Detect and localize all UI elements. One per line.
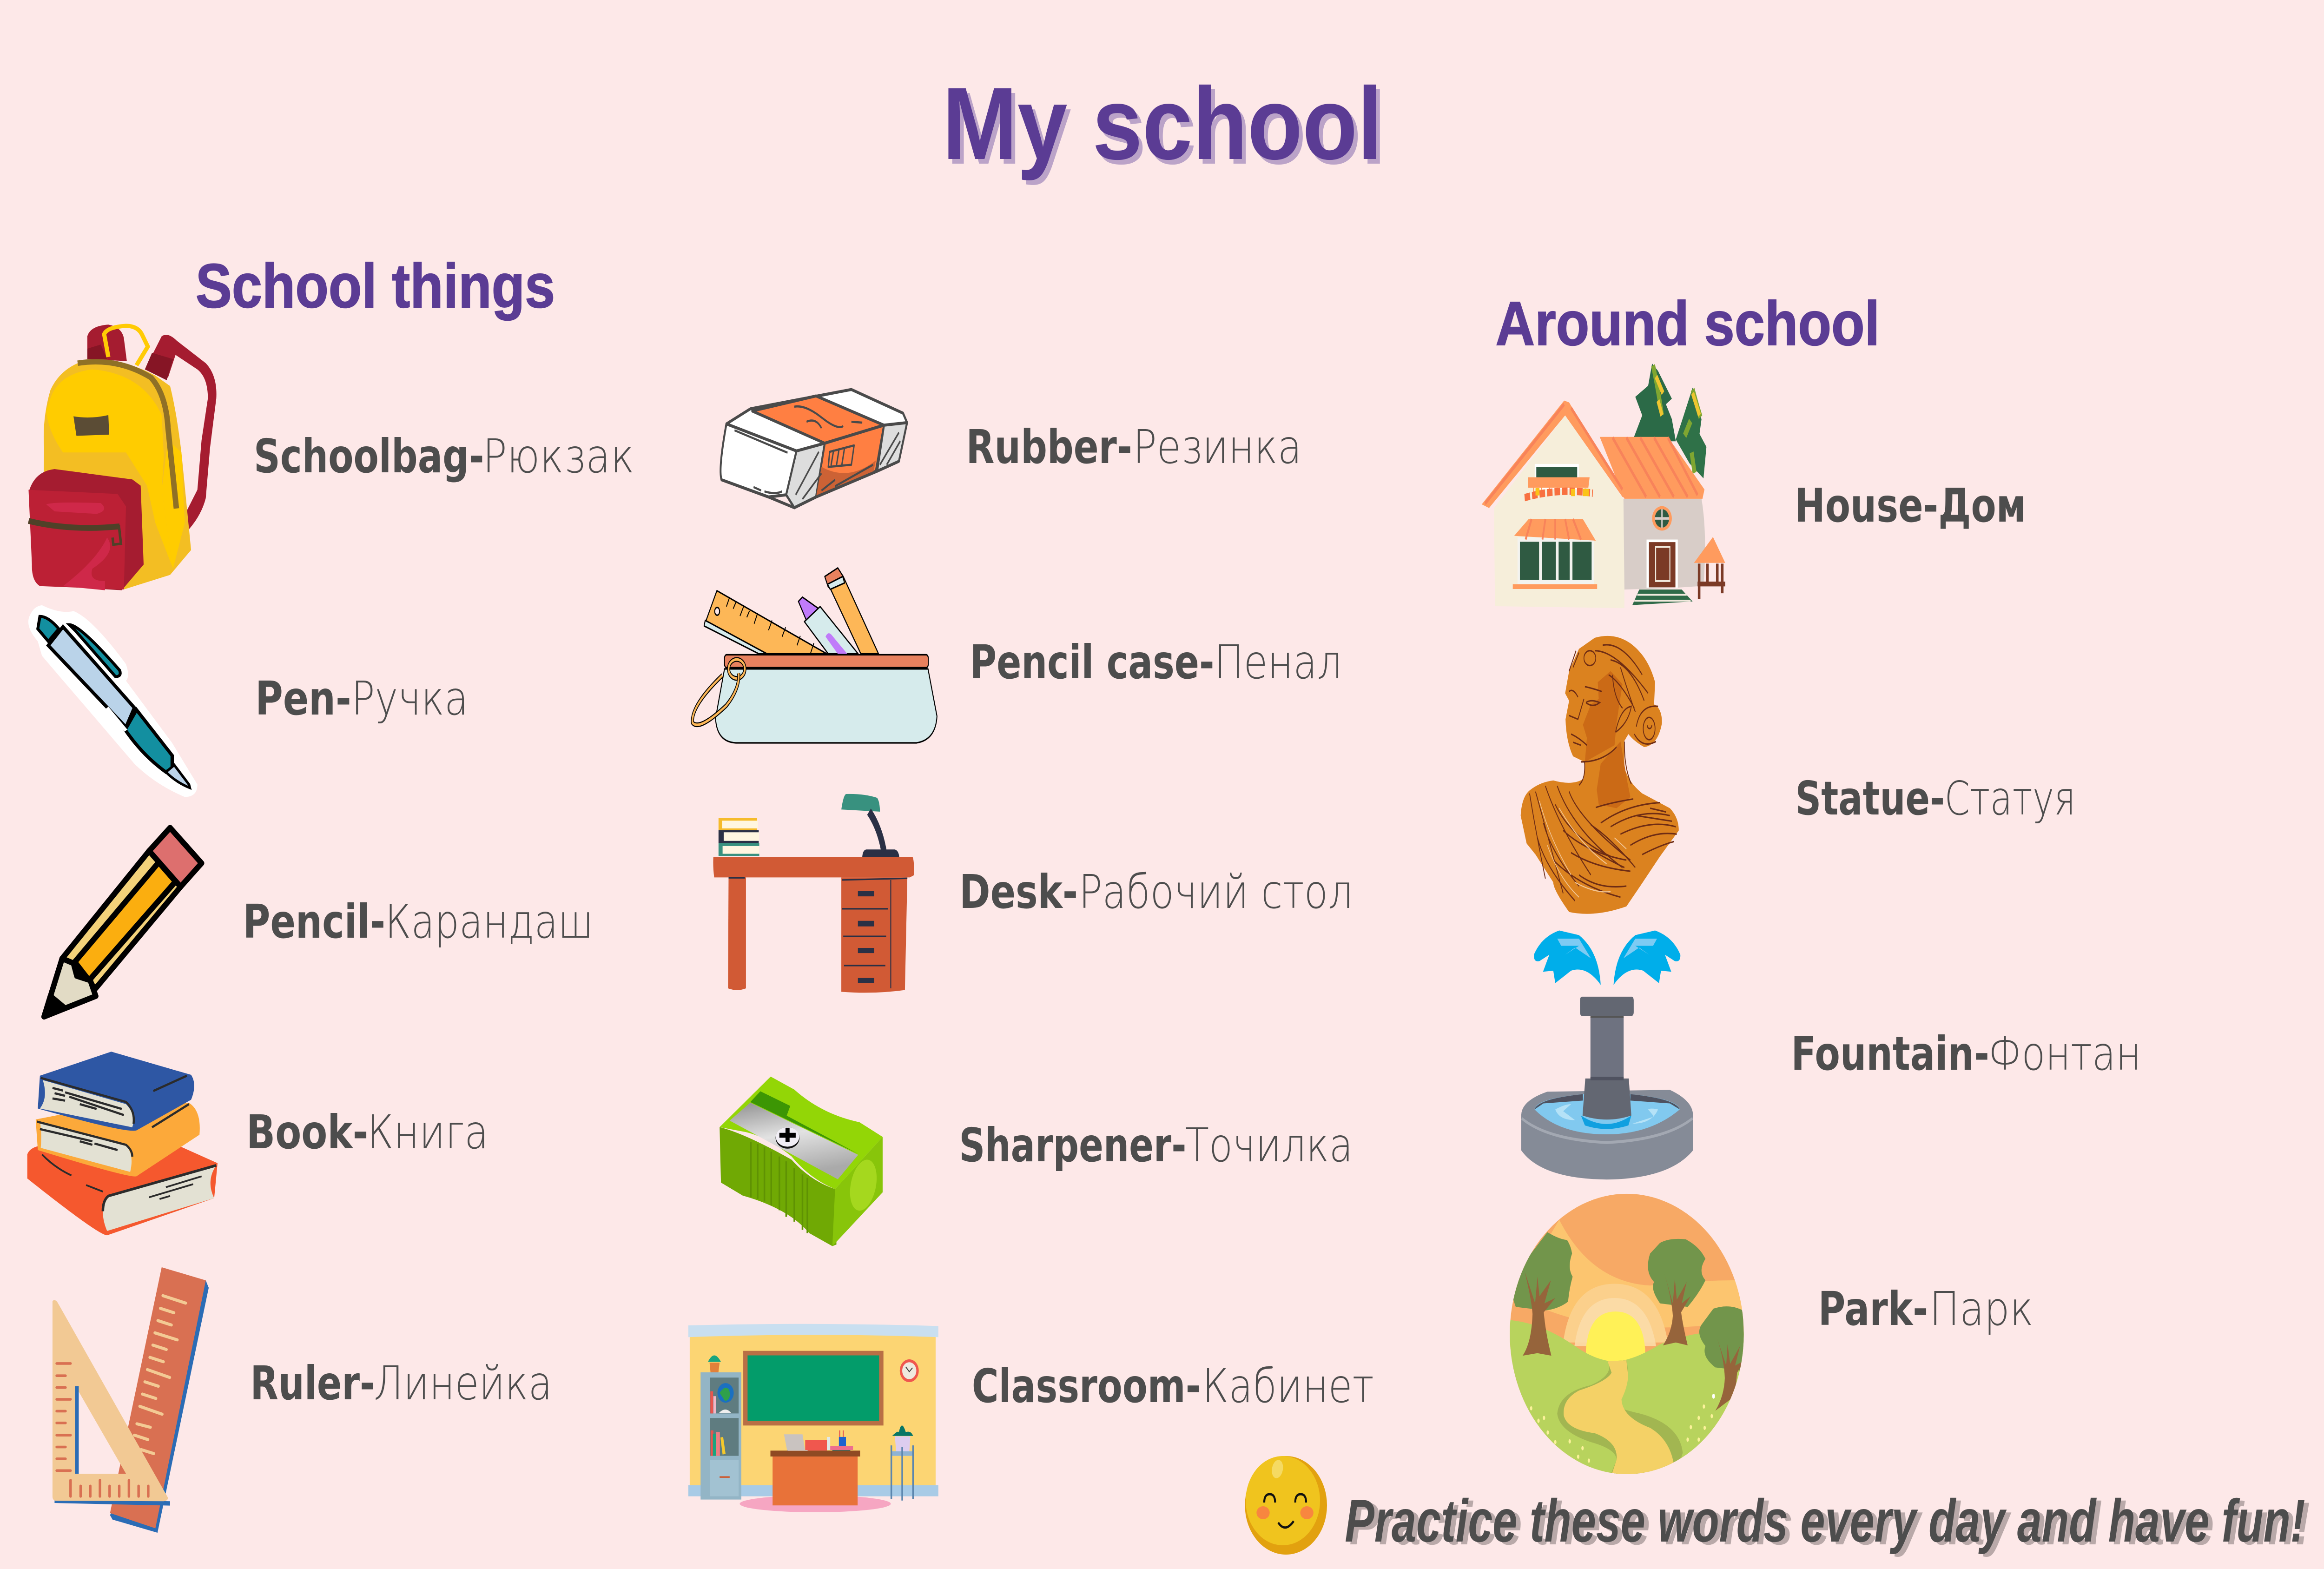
text: practice message: Practice these words every day and have fun! xyxy=(1345,1488,2305,1555)
icon: smiley xyxy=(1245,1456,1327,1555)
label: sharpener xyxy=(959,1119,1353,1172)
heading: school things: School things xyxy=(196,251,555,321)
label: sharpener: Точилка xyxy=(1185,1119,1353,1172)
panel: around school xyxy=(1482,289,2141,1475)
label: pen: Pen- xyxy=(255,672,351,726)
label: book: Книга xyxy=(367,1106,489,1159)
label: schoolbag xyxy=(254,430,634,483)
label: schoolbag: Schoolbag- xyxy=(254,430,484,483)
label: rubber: Rubber- xyxy=(966,420,1132,474)
label: fountain xyxy=(1791,1027,2141,1081)
label: statue: Statue- xyxy=(1795,772,1945,826)
label: park: Парк xyxy=(1929,1282,2034,1336)
icon: classroom xyxy=(688,1324,938,1512)
label: ruler xyxy=(250,1357,552,1410)
label: book xyxy=(246,1106,489,1159)
label: desk xyxy=(959,865,1353,919)
label: park xyxy=(1818,1282,2034,1336)
label: pencil case: Пенал xyxy=(1215,636,1342,689)
label: ruler: Ruler- xyxy=(250,1357,375,1410)
icon: sharpener xyxy=(720,1077,883,1246)
icon: rubber xyxy=(720,390,907,508)
label: rubber: Резинка xyxy=(1133,420,1302,474)
icon: park xyxy=(1510,1194,1745,1475)
label: statue xyxy=(1795,772,2076,826)
label: pencil case xyxy=(970,636,1342,689)
footer message xyxy=(1245,1456,2310,1558)
label: schoolbag: Рюкзак xyxy=(482,430,634,483)
label: classroom xyxy=(972,1359,1374,1413)
icon: books xyxy=(27,1052,218,1235)
icon: pen xyxy=(28,605,198,797)
title: My school xyxy=(946,71,1386,186)
label: statue: Статуя xyxy=(1944,772,2076,826)
icon: statue xyxy=(1521,636,1679,914)
label: classroom: Кабинет xyxy=(1202,1359,1374,1413)
icon: ruler and set square xyxy=(53,1267,209,1533)
heading: around school: Around school xyxy=(1496,289,1880,358)
label: book: Book- xyxy=(246,1106,369,1159)
label: pencil: Карандаш xyxy=(385,895,594,949)
label: park: Park- xyxy=(1818,1282,1928,1336)
icon: house xyxy=(1482,364,1725,608)
label: house: House-Дом xyxy=(1795,479,2026,533)
icon: fountain xyxy=(1521,931,1693,1179)
title: My school xyxy=(943,66,1382,181)
label: pen xyxy=(255,672,469,726)
label: pen: Ручка xyxy=(351,672,469,726)
icon: pencil xyxy=(44,828,202,1017)
icon: schoolbag xyxy=(28,324,217,590)
icon: pencil case xyxy=(693,568,937,743)
panel: school things xyxy=(27,251,1374,1533)
text: practice message: Practice these words every day and have fun! xyxy=(1349,1490,2310,1558)
icon: desk xyxy=(713,794,914,993)
label: desk: Desk- xyxy=(959,865,1078,919)
label: pencil xyxy=(243,895,594,949)
label: sharpener: Sharpener- xyxy=(959,1119,1186,1172)
label: pencil: Pencil- xyxy=(243,895,385,949)
label: fountain: Fountain- xyxy=(1791,1027,1989,1081)
label: fountain: Фонтан xyxy=(1988,1027,2141,1081)
label: rubber xyxy=(966,420,1302,474)
label: classroom: Classroom- xyxy=(972,1359,1201,1413)
label: pencil case: Pencil case- xyxy=(970,636,1215,689)
label: desk: Рабочий стол xyxy=(1079,865,1353,919)
label: ruler: Линейка xyxy=(374,1357,552,1410)
